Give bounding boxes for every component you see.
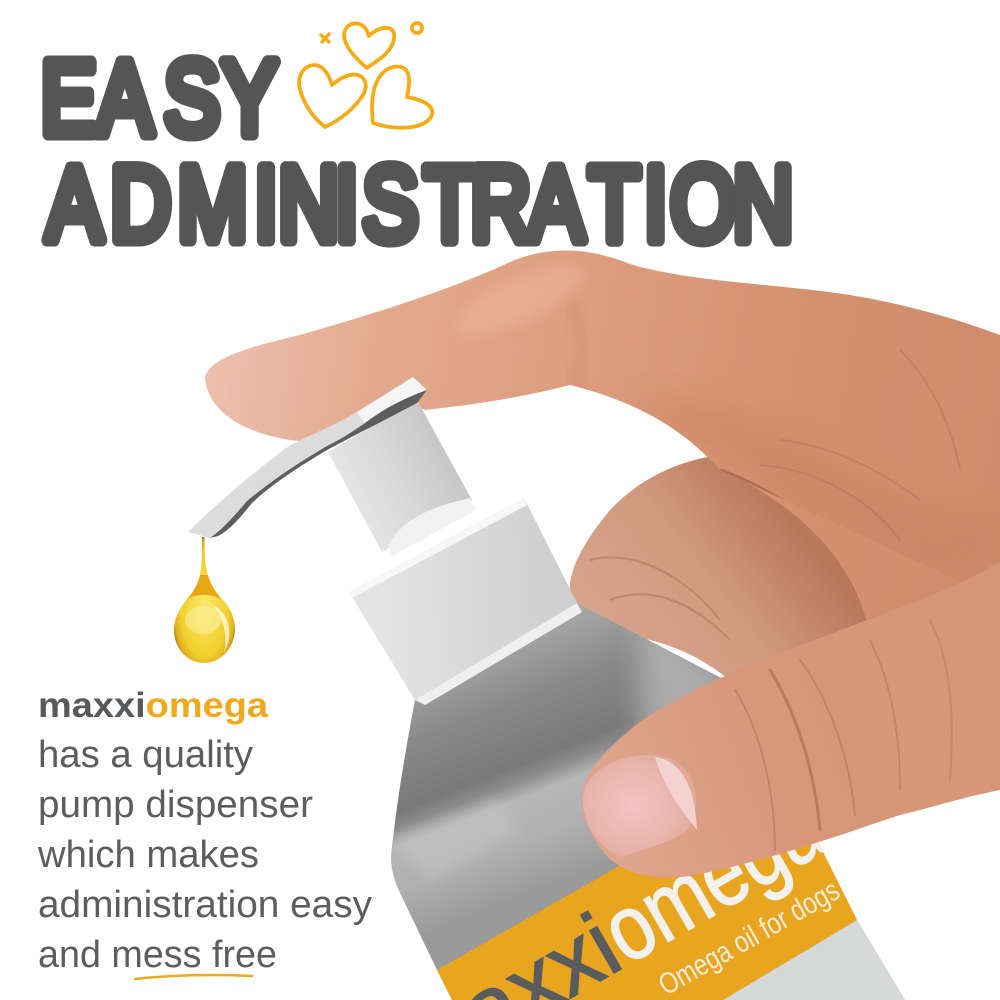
underline xyxy=(135,975,252,979)
line 3: which makes xyxy=(37,834,259,876)
hand: fingers behind pump xyxy=(205,251,1000,690)
pump cap xyxy=(349,498,582,705)
line 1: has a quality xyxy=(38,734,253,776)
hand: thumb xyxy=(582,562,1000,878)
line 5: and mess free xyxy=(38,934,277,976)
pump head xyxy=(188,377,427,538)
title line: easy: EASY xyxy=(41,40,278,157)
line 4: administration easy xyxy=(38,884,372,926)
pump spout and stem xyxy=(188,377,476,556)
description xyxy=(37,686,372,979)
hand shading xyxy=(447,251,1000,640)
index finger and palm xyxy=(205,251,1000,640)
bottle brand: omega xyxy=(585,776,841,983)
thumbnail xyxy=(583,755,696,857)
title xyxy=(41,40,793,263)
bottle body xyxy=(391,603,905,1000)
thumb creases xyxy=(735,620,952,850)
title line: administration: ADMINISTRATION xyxy=(46,146,793,263)
brand name: maxxiomega xyxy=(38,686,269,725)
bottle xyxy=(349,498,930,1000)
bottle brand xyxy=(472,842,824,1000)
icon: hearts xyxy=(299,23,432,128)
middle finger xyxy=(570,455,900,690)
bottle label band xyxy=(437,760,857,1000)
icon: oil drop xyxy=(174,537,235,663)
bottle descriptor: Omega oil for dogs xyxy=(653,874,845,1000)
thumb xyxy=(582,562,1000,878)
bottle lower section xyxy=(723,920,905,1000)
line 2: pump dispenser xyxy=(38,784,313,826)
pump stem xyxy=(328,400,472,552)
